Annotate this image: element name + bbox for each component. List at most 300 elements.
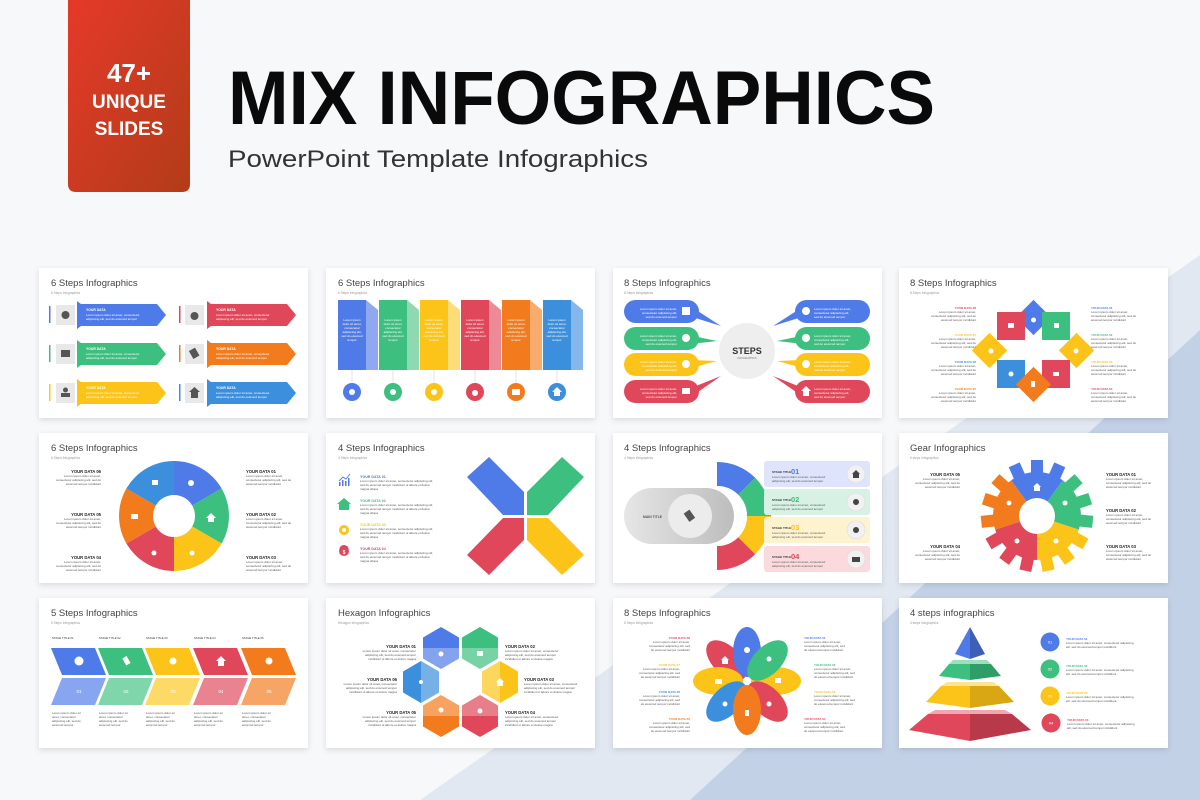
card 4: 8 steps rotated squares: consectetur adipiscing elit, sed do: [931, 395, 976, 399]
card 11: 8 steps flower: Lorem ipsum dolor sit amet,: [643, 667, 680, 671]
card 5: 6 steps puzzle donut: eiusmod tempor incididunt: [246, 482, 281, 486]
card 11: 8 steps flower: consectetur adipiscing elit, sed: [814, 698, 855, 702]
card 4: 8 steps rotated squares: YOUR DATA 01: [1091, 306, 1113, 310]
card 8: gear infographics: Lorem ipsum dolor sit amet,: [923, 477, 960, 481]
card 1: 6 steps arrows: adipiscing elit, sed do eiusmod tempor: [216, 317, 267, 321]
card 2: 6 steps folded strips: 6 Steps Infographics: [338, 291, 367, 295]
card 4: 8 steps rotated squares: consectetur adipiscing elit, sed do: [931, 368, 976, 372]
card 2: 6 steps folded strips: sed do eiusmod: [423, 334, 445, 338]
card 2: 6 steps folded strips: sed do eiusmod: [382, 334, 404, 338]
card 12: 4 steps pyramid: elit, sed do eiusmod tempor incididunt: [1067, 726, 1118, 730]
card 3: 8 steps speech bubbles: sed do eiusmod tempor: [646, 395, 677, 399]
card 2: 6 steps folded strips: sed do eiusmod: [341, 334, 363, 338]
card 5: 6 steps puzzle donut: consectetur adipiscing elit, sed do: [246, 564, 291, 568]
card 1: 6 steps arrows: Lorem ipsum dolor sit amet, consectetur: [86, 352, 139, 356]
card 5: 6 steps puzzle donut: Lorem ipsum dolor sit amet,: [246, 560, 283, 564]
card 11: 8 steps flower: Lorem ipsum dolor sit amet,: [804, 721, 841, 725]
card 2: 6 steps folded strips: adipiscing elit,: [466, 330, 485, 334]
card 9: 5 steps chevrons: STAGE TITLE 02: [99, 636, 121, 640]
card 3: 8 steps speech bubbles: consectetur adipiscing elit,: [814, 391, 849, 395]
card 8: gear infographics: Lorem ipsum dolor sit amet,: [923, 549, 960, 553]
card 7: 4 steps semicircle with stage titles: Lorem ipsum dolor sit amet, consectetur: [772, 503, 825, 507]
card 5: 6 steps puzzle donut: eiusmod tempor incididunt: [246, 525, 281, 529]
card 5: 6 steps puzzle donut: 6 Steps Infographics: [51, 456, 80, 460]
card 5: 6 steps puzzle donut: consectetur adipiscing elit, sed do: [56, 564, 101, 568]
card 1: 6 steps arrows: Lorem ipsum dolor sit amet, consectetur: [86, 391, 139, 395]
card 12: 4 steps pyramid: 01: [1048, 640, 1053, 644]
card 12: 4 steps pyramid: 02: [1048, 666, 1053, 672]
card 8: gear infographics: Gear Infographics: [910, 443, 986, 454]
card 2: 6 steps folded strips: adipiscing elit,: [548, 330, 567, 334]
card 8: gear infographics: consectetur adipiscing elit, sed do: [915, 481, 960, 485]
card 8: gear infographics: [899, 433, 1168, 583]
card 12: 4 steps pyramid: elit, sed do eiusmod tempor incididunt: [1066, 699, 1117, 703]
card 10: hexagon infographics: Lorem ipsum dolor sit amet, consectetur: [505, 715, 558, 719]
card 4: 8 steps rotated squares: Lorem ipsum dolor sit amet,: [1091, 391, 1128, 395]
card 11: 8 steps flower: consectetur adipiscing elit, sed: [804, 644, 845, 648]
title: MIX INFOGRAPHICS: [228, 56, 935, 141]
card 2: 6 steps folded strips: dolor sit amet,: [425, 322, 444, 326]
card 7: 4 steps semicircle with stage titles: 04: [791, 552, 800, 561]
card 9: 5 steps chevrons: amet, consectetur: [242, 715, 266, 719]
card 11: 8 steps flower: consectetur adipiscing elit, sed: [639, 671, 680, 675]
card 3: 8 steps speech bubbles: Lorem ipsum dolor sit amet,: [640, 360, 677, 364]
card 3: 8 steps speech bubbles: STEPS: [732, 346, 762, 356]
card 5: 6 steps puzzle donut: 6 Steps Infographics: [51, 443, 138, 454]
card 10: hexagon infographics: Lorem ipsum dolor sit amet, consectetur: [363, 649, 416, 653]
card 6: 4 steps X: 4 Steps Infographics: [338, 456, 367, 460]
card 6: 4 steps X: Lorem ipsum dolor sit amet, consectetur adipiscing elit,: [360, 551, 433, 555]
card 1: 6 steps arrows: adipiscing elit, sed do eiusmod tempor: [216, 395, 267, 399]
card 5: 6 steps puzzle donut: YOUR DATA 05: [71, 512, 102, 517]
card 12: 4 steps pyramid: Lorem ipsum dolor sit amet, consectetur adipiscing: [1066, 695, 1134, 699]
card 12: 4 steps pyramid: [899, 598, 1168, 748]
card 11: 8 steps flower: YOUR DATA 07: [659, 663, 680, 667]
card 10: hexagon infographics: incididunt ut labore et dolore magna: [505, 723, 553, 727]
card 11: 8 steps flower: [613, 598, 882, 748]
card 3: 8 steps speech bubbles: consectetur adipiscing elit,: [642, 364, 677, 368]
card 3: 8 steps speech bubbles: consectetur adipiscing elit,: [814, 311, 849, 315]
card 4: 8 steps rotated squares: consectetur adipiscing elit, sed do: [1091, 395, 1136, 399]
card 11: 8 steps flower: YOUR DATA 06: [659, 690, 680, 694]
card 7: 4 steps semicircle with stage titles: adipiscing elit, sed do eiusmod tempor: [772, 507, 823, 511]
card 10: hexagon infographics: Lorem ipsum dolor sit amet, consectetur: [363, 715, 416, 719]
card 6: 4 steps X: YOUR DATA 04: [360, 547, 386, 551]
card 3: 8 steps speech bubbles: [613, 268, 882, 418]
card 3: 8 steps speech bubbles: sed do eiusmod tempor: [646, 342, 677, 346]
card 9: 5 steps chevrons: Lorem ipsum dolor sit: [146, 711, 175, 715]
card 11: 8 steps flower: Lorem ipsum dolor sit amet,: [653, 640, 690, 644]
card 4: 8 steps rotated squares: YOUR DATA 08: [955, 306, 976, 310]
card 4: 8 steps rotated squares: YOUR DATA 02: [1091, 333, 1113, 337]
card 10: hexagon infographics: YOUR DATA 04: [505, 710, 536, 715]
card 4: 8 steps rotated squares: YOUR DATA 05: [955, 387, 976, 391]
card 6: 4 steps X: YOUR DATA 03: [360, 523, 386, 527]
card 2: 6 steps folded strips: sed do eiusmod: [464, 334, 486, 338]
card 5: 6 steps puzzle donut: consectetur adipiscing elit, sed do: [246, 521, 291, 525]
card 10: hexagon infographics: incididunt ut labore et dolore magna: [349, 690, 397, 694]
card 7: 4 steps semicircle with stage titles: 01: [791, 467, 799, 476]
card 9: 5 steps chevrons: STAGE TITLE 05: [242, 636, 264, 640]
card 1: 6 steps arrows: YOUR DATA: [86, 347, 106, 351]
card 2: 6 steps folded strips: tempor: [470, 338, 480, 342]
card 2: 6 steps folded strips: dolor sit amet,: [384, 322, 403, 326]
card 5: 6 steps puzzle donut: [39, 433, 308, 583]
card 2: 6 steps folded strips: dolor sit amet,: [343, 322, 362, 326]
card 2: 6 steps folded strips: adipiscing elit,: [343, 330, 362, 334]
card 11: 8 steps flower: 8 Steps Infographics: [624, 608, 711, 619]
card 4: 8 steps rotated squares: Lorem ipsum dolor sit amet,: [1091, 364, 1128, 368]
card 3: 8 steps speech bubbles: Lorem ipsum dolor sit amet,: [640, 307, 677, 311]
card 5: 6 steps puzzle donut: YOUR DATA 03: [246, 555, 277, 560]
card 3: 8 steps speech bubbles: sed do eiusmod tempor: [814, 368, 845, 372]
card 12: 4 steps pyramid: 4 steps infographics: [910, 608, 995, 619]
card 12: 4 steps pyramid: YOUR DATA 01: [1066, 637, 1088, 641]
card 1: 6 steps arrows: adipiscing elit, sed do eiusmod tempor: [86, 356, 137, 360]
card 4: 8 steps rotated squares: consectetur adipiscing elit, sed do: [1091, 341, 1136, 345]
card 7: 4 steps semicircle with stage titles: 4 Steps Infographics: [624, 443, 711, 454]
card 9: 5 steps chevrons: STAGE TITLE 04: [194, 636, 216, 640]
card 6: 4 steps X: Lorem ipsum dolor sit amet, consectetur adipiscing elit,: [360, 479, 433, 483]
card 3: 8 steps speech bubbles: sed do eiusmod tempor: [814, 315, 845, 319]
card 6: 4 steps X: Lorem ipsum dolor sit amet, consectetur adipiscing elit,: [360, 527, 433, 531]
card 12: 4 steps pyramid: elit, sed do eiusmod tempor incididunt: [1066, 645, 1117, 649]
card 1: 6 steps arrows: adipiscing elit, sed do eiusmod tempor: [216, 356, 267, 360]
card 6: 4 steps X: $: [343, 550, 346, 556]
card 5: 6 steps puzzle donut: consectetur adipiscing elit, sed do: [56, 478, 101, 482]
card 12: 4 steps pyramid: Lorem ipsum dolor sit amet, consectetur adipiscing: [1066, 668, 1134, 672]
card 11: 8 steps flower: YOUR DATA 04: [804, 717, 826, 721]
card 10: hexagon infographics: YOUR DATA 02: [505, 644, 536, 649]
card 11: 8 steps flower: YOUR DATA 08: [669, 636, 690, 640]
card 8: gear infographics: 5 steps Infographics: [910, 456, 939, 460]
card 9: 5 steps chevrons: eiusmod tempor: [194, 723, 216, 727]
card 9: 5 steps chevrons: amet, consectetur: [52, 715, 76, 719]
card 6: 4 steps X: magna aliqua: [360, 535, 378, 539]
card 6: 4 steps X: magna aliqua: [360, 559, 378, 563]
card 8: gear infographics: eiusmod tempor incididunt: [1106, 485, 1141, 489]
card 7: 4 steps semicircle with stage titles: STAGE TITLE: [772, 498, 791, 502]
card 3: 8 steps speech bubbles: 8 Steps Infographics: [624, 291, 653, 295]
card 7: 4 steps semicircle with stage titles: 02: [791, 495, 799, 504]
card 8: gear infographics: eiusmod tempor incididunt: [925, 557, 960, 561]
card 3: 8 steps speech bubbles: Lorem ipsum dolor sit amet,: [814, 387, 851, 391]
badge: 47+ unique slides: UNIQUE: [92, 92, 166, 113]
card 10: hexagon infographics: Lorem ipsum dolor sit amet, consectetur: [344, 682, 397, 686]
card 5: 6 steps puzzle donut: Lorem ipsum dolor sit amet,: [64, 474, 101, 478]
card 7: 4 steps semicircle with stage titles: Lorem ipsum dolor sit amet, consectetur: [772, 560, 825, 564]
card 10: hexagon infographics: adipiscing elit, sed do eiusmod tempor: [524, 686, 575, 690]
card 4: 8 steps rotated squares: [899, 268, 1168, 418]
card 8: gear infographics: eiusmod tempor incididunt: [925, 485, 960, 489]
card 3: 8 steps speech bubbles: consectetur adipiscing elit,: [642, 391, 677, 395]
card 8: gear infographics: consectetur adipiscing elit, sed do: [1106, 481, 1151, 485]
card 5: 6 steps puzzle donut: YOUR DATA 04: [71, 555, 102, 560]
card 2: 6 steps folded strips: consectetur: [467, 326, 483, 330]
card 7: 4 steps semicircle with stage titles: adipiscing elit, sed do eiusmod tempor: [772, 564, 823, 568]
card 1: 6 steps arrows: YOUR DATA: [216, 347, 236, 351]
card 6: 4 steps X: Lorem ipsum dolor sit amet, consectetur adipiscing elit,: [360, 503, 433, 507]
card 8: gear infographics: Lorem ipsum dolor sit amet,: [1106, 549, 1143, 553]
card 4: 8 steps rotated squares: 8 Steps Infographics: [910, 278, 997, 289]
card 6: 4 steps X: [326, 433, 595, 583]
card 11: 8 steps flower: do eiusmod tempor incididunt: [804, 648, 843, 652]
card 4: 8 steps rotated squares: eiusmod tempor incididunt: [1091, 318, 1126, 322]
card 2: 6 steps folded strips: consectetur: [385, 326, 401, 330]
card 1: 6 steps arrows: Lorem ipsum dolor sit amet, consectetur: [216, 352, 269, 356]
card 11: 8 steps flower: Lorem ipsum dolor sit amet,: [643, 694, 680, 698]
card 2: 6 steps folded strips: consectetur: [549, 326, 565, 330]
card 5: 6 steps puzzle donut: eiusmod tempor incididunt: [66, 482, 101, 486]
card 2: 6 steps folded strips: Lorem ipsum: [343, 318, 361, 322]
card 9: 5 steps chevrons: [39, 598, 308, 748]
card 7: 4 steps semicircle with stage titles: 4 Steps Infographics: [624, 456, 653, 460]
card 6: 4 steps X: magna aliqua: [360, 487, 378, 491]
card 12: 4 steps pyramid: 03: [1048, 694, 1053, 698]
card 2: 6 steps folded strips: consectetur: [426, 326, 442, 330]
card 8: gear infographics: eiusmod tempor incididunt: [1106, 557, 1141, 561]
card 10: hexagon infographics: incididunt ut labore et dolore magna: [505, 657, 553, 661]
card 2: 6 steps folded strips: Lorem ipsum: [384, 318, 402, 322]
card 5: 6 steps puzzle donut: YOUR DATA 02: [246, 512, 277, 517]
card 11: 8 steps flower: Lorem ipsum dolor sit amet,: [814, 694, 851, 698]
card 12: 4 steps pyramid: 4 steps infographics: [910, 621, 939, 625]
card 8: gear infographics: YOUR DATA 05: [930, 472, 961, 477]
card 11: 8 steps flower: YOUR DATA 01: [804, 636, 826, 640]
card 11: 8 steps flower: YOUR DATA 02: [814, 663, 836, 667]
card 4: 8 steps rotated squares: eiusmod tempor incididunt: [941, 318, 976, 322]
card 9: 5 steps chevrons: eiusmod tempor: [99, 723, 121, 727]
card 5: 6 steps puzzle donut: consectetur adipiscing elit, sed do: [56, 521, 101, 525]
card 9: 5 steps chevrons: STAGE TITLE 01: [52, 636, 74, 640]
card 6: 4 steps X: magna aliqua: [360, 511, 378, 515]
card 11: 8 steps flower: 8 Steps Infographics: [624, 621, 653, 625]
card 4: 8 steps rotated squares: eiusmod tempor incididunt: [1091, 345, 1126, 349]
card 11: 8 steps flower: do eiusmod tempor incididunt: [641, 675, 680, 679]
card 5: 6 steps puzzle donut: Lorem ipsum dolor sit amet,: [246, 474, 283, 478]
card 9: 5 steps chevrons: Lorem ipsum dolor sit: [194, 711, 223, 715]
card 6: 4 steps X: sed do eiusmod tempor incididunt ut labore et dolore: [360, 507, 430, 511]
card 1: 6 steps arrows: 6 Steps Infographics: [51, 278, 138, 289]
card 6: 4 steps X: sed do eiusmod tempor incididunt ut labore et dolore: [360, 483, 430, 487]
card 8: gear infographics: consectetur adipiscing elit, sed do: [1106, 553, 1151, 557]
card 4: 8 steps rotated squares: eiusmod tempor incididunt: [1091, 399, 1126, 403]
card 5: 6 steps puzzle donut: YOUR DATA 06: [71, 469, 102, 474]
card 4: 8 steps rotated squares: consectetur adipiscing elit, sed do: [931, 314, 976, 318]
card 9: 5 steps chevrons: amet, consectetur: [146, 715, 170, 719]
card 3: 8 steps speech bubbles: Lorem ipsum dolor sit amet,: [814, 334, 851, 338]
card 12: 4 steps pyramid: YOUR DATA 03: [1066, 691, 1088, 695]
card 9: 5 steps chevrons: 03: [170, 689, 176, 694]
subtitle: PowerPoint Template Infographics: [228, 146, 648, 173]
card 8: gear infographics: YOUR DATA 03: [1106, 544, 1137, 549]
card 10: hexagon infographics: Lorem ipsum dolor sit amet, consectetur: [524, 682, 577, 686]
card 4: 8 steps rotated squares: consectetur adipiscing elit, sed do: [931, 341, 976, 345]
card 4: 8 steps rotated squares: Lorem ipsum dolor sit amet,: [1091, 310, 1128, 314]
card 4: 8 steps rotated squares: Lorem ipsum dolor sit amet,: [939, 310, 976, 314]
card 3: 8 steps speech bubbles: consectetur adipiscing elit,: [642, 338, 677, 342]
card 3: 8 steps speech bubbles: consectetur adipiscing elit,: [642, 311, 677, 315]
card 4: 8 steps rotated squares: eiusmod tempor incididunt: [941, 399, 976, 403]
card 10: hexagon infographics: adipiscing elit, sed do eiusmod tempor: [346, 686, 397, 690]
card 11: 8 steps flower: consectetur adipiscing elit, sed: [804, 725, 845, 729]
card 7: 4 steps semicircle with stage titles: Lorem ipsum dolor sit amet, consectetur: [772, 531, 825, 535]
card 3: 8 steps speech bubbles: sed do eiusmod tempor: [646, 315, 677, 319]
card 4: 8 steps rotated squares: eiusmod tempor incididunt: [941, 345, 976, 349]
card 9: 5 steps chevrons: eiusmod tempor: [52, 723, 74, 727]
card 9: 5 steps chevrons: 02: [123, 689, 129, 694]
card 11: 8 steps flower: consectetur adipiscing elit, sed: [649, 725, 690, 729]
card 11: 8 steps flower: Lorem ipsum dolor sit amet,: [653, 721, 690, 725]
card 7: 4 steps semicircle with stage titles: adipiscing elit, sed do eiusmod tempor: [772, 535, 823, 539]
card 6: 4 steps X: YOUR DATA 01: [360, 475, 386, 479]
card 8: gear infographics: YOUR DATA 02: [1106, 508, 1137, 513]
card 4: 8 steps rotated squares: YOUR DATA 03: [1091, 360, 1113, 364]
card 9: 5 steps chevrons: adipiscing elit, sed do: [194, 719, 223, 723]
card 4: 8 steps rotated squares: Lorem ipsum dolor sit amet,: [939, 391, 976, 395]
card 1: 6 steps arrows: adipiscing elit, sed do eiusmod tempor: [86, 395, 137, 399]
card 9: 5 steps chevrons: adipiscing elit, sed do: [146, 719, 175, 723]
card 9: 5 steps chevrons: eiusmod tempor: [242, 723, 264, 727]
card 3: 8 steps speech bubbles: Lorem ipsum dolor sit amet,: [814, 360, 851, 364]
card 8: gear infographics: Lorem ipsum dolor sit amet,: [1106, 513, 1143, 517]
card 2: 6 steps folded strips: sed do eiusmod: [505, 334, 527, 338]
badge: 47+ unique slides: 47+: [107, 58, 151, 88]
card 2: 6 steps folded strips: 6 Steps Infographics: [338, 278, 425, 289]
card 2: 6 steps folded strips: sed do eiusmod: [546, 334, 568, 338]
card 2: 6 steps folded strips: dolor sit amet,: [507, 322, 526, 326]
card 10: hexagon infographics: adipiscing elit, sed do eiusmod tempor: [505, 653, 556, 657]
card 11: 8 steps flower: Lorem ipsum dolor sit amet,: [804, 640, 841, 644]
card 7: 4 steps semicircle with stage titles: [613, 433, 882, 583]
card 1: 6 steps arrows: YOUR DATA: [216, 386, 236, 390]
card 5: 6 steps puzzle donut: Lorem ipsum dolor sit amet,: [246, 517, 283, 521]
card 6: 4 steps X: YOUR DATA 02: [360, 499, 386, 503]
card 5: 6 steps puzzle donut: eiusmod tempor incididunt: [66, 568, 101, 572]
card 12: 4 steps pyramid: Lorem ipsum dolor sit amet, consectetur adipiscing: [1066, 641, 1134, 645]
card 10: hexagon infographics: YOUR DATA 01: [386, 644, 417, 649]
card 1: 6 steps arrows: Lorem ipsum dolor sit amet, consectetur: [86, 313, 139, 317]
card 12: 4 steps pyramid: Lorem ipsum dolor sit amet, consectetur adipiscing: [1067, 722, 1135, 726]
card 11: 8 steps flower: Lorem ipsum dolor sit amet,: [814, 667, 851, 671]
card 6: 4 steps X: sed do eiusmod tempor incididunt ut labore et dolore: [360, 531, 430, 535]
card 2: 6 steps folded strips: consectetur: [508, 326, 524, 330]
card 9: 5 steps chevrons: Lorem ipsum dolor sit: [242, 711, 271, 715]
card 9: 5 steps chevrons: amet, consectetur: [99, 715, 123, 719]
card 11: 8 steps flower: do eiusmod tempor incididunt: [814, 675, 853, 679]
card 12: 4 steps pyramid: elit, sed do eiusmod tempor incididunt: [1066, 672, 1117, 676]
card 9: 5 steps chevrons: adipiscing elit, sed do: [99, 719, 128, 723]
card 2: 6 steps folded strips: tempor: [388, 338, 398, 342]
card 10: hexagon infographics: Hexagon Infographics: [338, 621, 369, 625]
card 4: 8 steps rotated squares: Lorem ipsum dolor sit amet,: [939, 337, 976, 341]
card 3: 8 steps speech bubbles: 8 Steps Infographics: [624, 278, 711, 289]
card 5: 6 steps puzzle donut: Lorem ipsum dolor sit amet,: [64, 560, 101, 564]
card 9: 5 steps chevrons: Lorem ipsum dolor sit: [99, 711, 128, 715]
card 3: 8 steps speech bubbles: sed do eiusmod tempor: [646, 368, 677, 372]
card 5: 6 steps puzzle donut: Lorem ipsum dolor sit amet,: [64, 517, 101, 521]
card 11: 8 steps flower: consectetur adipiscing elit, sed: [814, 671, 855, 675]
card 10: hexagon infographics: incididunt ut labore et dolore magna: [524, 690, 572, 694]
card 1: 6 steps arrows: YOUR DATA: [86, 386, 106, 390]
card 7: 4 steps semicircle with stage titles: STAGE TITLE: [772, 526, 791, 530]
card 10: hexagon infographics: [326, 598, 595, 748]
card 4: 8 steps rotated squares: consectetur adipiscing elit, sed do: [1091, 368, 1136, 372]
card 2: 6 steps folded strips: Lorem ipsum: [548, 318, 566, 322]
card 4: 8 steps rotated squares: Lorem ipsum dolor sit amet,: [939, 364, 976, 368]
card 9: 5 steps chevrons: amet, consectetur: [194, 715, 218, 719]
card 1: 6 steps arrows: 6 Steps Infographics: [51, 291, 80, 295]
card 3: 8 steps speech bubbles: consectetur adipiscing elit,: [814, 364, 849, 368]
card 10: hexagon infographics: adipiscing elit, sed do eiusmod tempor: [365, 719, 416, 723]
card 2: 6 steps folded strips: [326, 268, 595, 418]
card 4: 8 steps rotated squares: YOUR DATA 06: [955, 360, 976, 364]
card 7: 4 steps semicircle with stage titles: MAIN TITLE: [643, 515, 663, 519]
card 3: 8 steps speech bubbles: Lorem ipsum dolor sit amet,: [640, 334, 677, 338]
card 1: 6 steps arrows: YOUR DATA: [216, 308, 236, 312]
card 9: 5 steps chevrons: 01: [76, 689, 82, 694]
card 10: hexagon infographics: adipiscing elit, sed do eiusmod tempor: [505, 719, 556, 723]
card 11: 8 steps flower: do eiusmod tempor incididunt: [804, 729, 843, 733]
card 12: 4 steps pyramid: 04: [1049, 720, 1054, 726]
card 9: 5 steps chevrons: 5 Steps Infographics: [51, 608, 138, 619]
card 9: 5 steps chevrons: eiusmod tempor: [146, 723, 168, 727]
card 9: 5 steps chevrons: 5 Steps Infographics: [51, 621, 80, 625]
card 2: 6 steps folded strips: tempor: [429, 338, 439, 342]
card 2: 6 steps folded strips: adipiscing elit,: [507, 330, 526, 334]
card 7: 4 steps semicircle with stage titles: Lorem ipsum dolor sit amet, consectetur: [772, 475, 825, 479]
card 3: 8 steps speech bubbles: sed do eiusmod tempor: [814, 342, 845, 346]
card 6: 4 steps X: 4 Steps Infographics: [338, 443, 425, 454]
card 10: hexagon infographics: incididunt ut labore et dolore magna: [368, 657, 416, 661]
card 11: 8 steps flower: do eiusmod tempor incididunt: [814, 702, 853, 706]
card 5: 6 steps puzzle donut: eiusmod tempor incididunt: [66, 525, 101, 529]
card 4: 8 steps rotated squares: 8 Steps Infographics: [910, 291, 939, 295]
card 11: 8 steps flower: YOUR DATA 03: [814, 690, 836, 694]
card 9: 5 steps chevrons: 04: [218, 689, 224, 694]
card 3: 8 steps speech bubbles: consectetur adipiscing elit,: [814, 338, 849, 342]
card 3: 8 steps speech bubbles: Lorem ipsum dolor sit amet,: [640, 387, 677, 391]
card 7: 4 steps semicircle with stage titles: STAGE TITLE: [772, 555, 791, 559]
card 5: 6 steps puzzle donut: eiusmod tempor incididunt: [246, 568, 281, 572]
card 11: 8 steps flower: do eiusmod tempor incididunt: [641, 702, 680, 706]
card 11: 8 steps flower: consectetur adipiscing elit, sed: [639, 698, 680, 702]
card 1: 6 steps arrows: adipiscing elit, sed do eiusmod tempor: [86, 317, 137, 321]
card 2: 6 steps folded strips: Lorem ipsum: [425, 318, 443, 322]
card 2: 6 steps folded strips: dolor sit amet,: [548, 322, 567, 326]
card 8: gear infographics: YOUR DATA 01: [1106, 472, 1137, 477]
card 4: 8 steps rotated squares: YOUR DATA 07: [955, 333, 976, 337]
card 2: 6 steps folded strips: adipiscing elit,: [384, 330, 403, 334]
card 10: hexagon infographics: Hexagon Infographics: [338, 608, 431, 619]
card 3: 8 steps speech bubbles: Lorem ipsum dolor sit amet,: [814, 307, 851, 311]
card 1: 6 steps arrows: [39, 268, 308, 418]
card 2: 6 steps folded strips: tempor: [552, 338, 562, 342]
card 6: 4 steps X: sed do eiusmod tempor incididunt ut labore et dolore: [360, 555, 430, 559]
card 8: gear infographics: YOUR DATA 04: [930, 544, 961, 549]
card 9: 5 steps chevrons: adipiscing elit, sed do: [242, 719, 271, 723]
card 2: 6 steps folded strips: adipiscing elit,: [425, 330, 444, 334]
card 4: 8 steps rotated squares: eiusmod tempor incididunt: [1091, 372, 1126, 376]
badge: 47+ unique slides: [68, 0, 190, 192]
card 8: gear infographics: Lorem ipsum dolor sit amet,: [1106, 477, 1143, 481]
card 10: hexagon infographics: adipiscing elit, sed do eiusmod tempor: [365, 653, 416, 657]
card 10: hexagon infographics: YOUR DATA 03: [524, 677, 555, 682]
card 2: 6 steps folded strips: consectetur: [344, 326, 360, 330]
card 4: 8 steps rotated squares: Lorem ipsum dolor sit amet,: [1091, 337, 1128, 341]
card 4: 8 steps rotated squares: YOUR DATA 04: [1091, 387, 1113, 391]
card 7: 4 steps semicircle with stage titles: adipiscing elit, sed do eiusmod tempor: [772, 479, 823, 483]
